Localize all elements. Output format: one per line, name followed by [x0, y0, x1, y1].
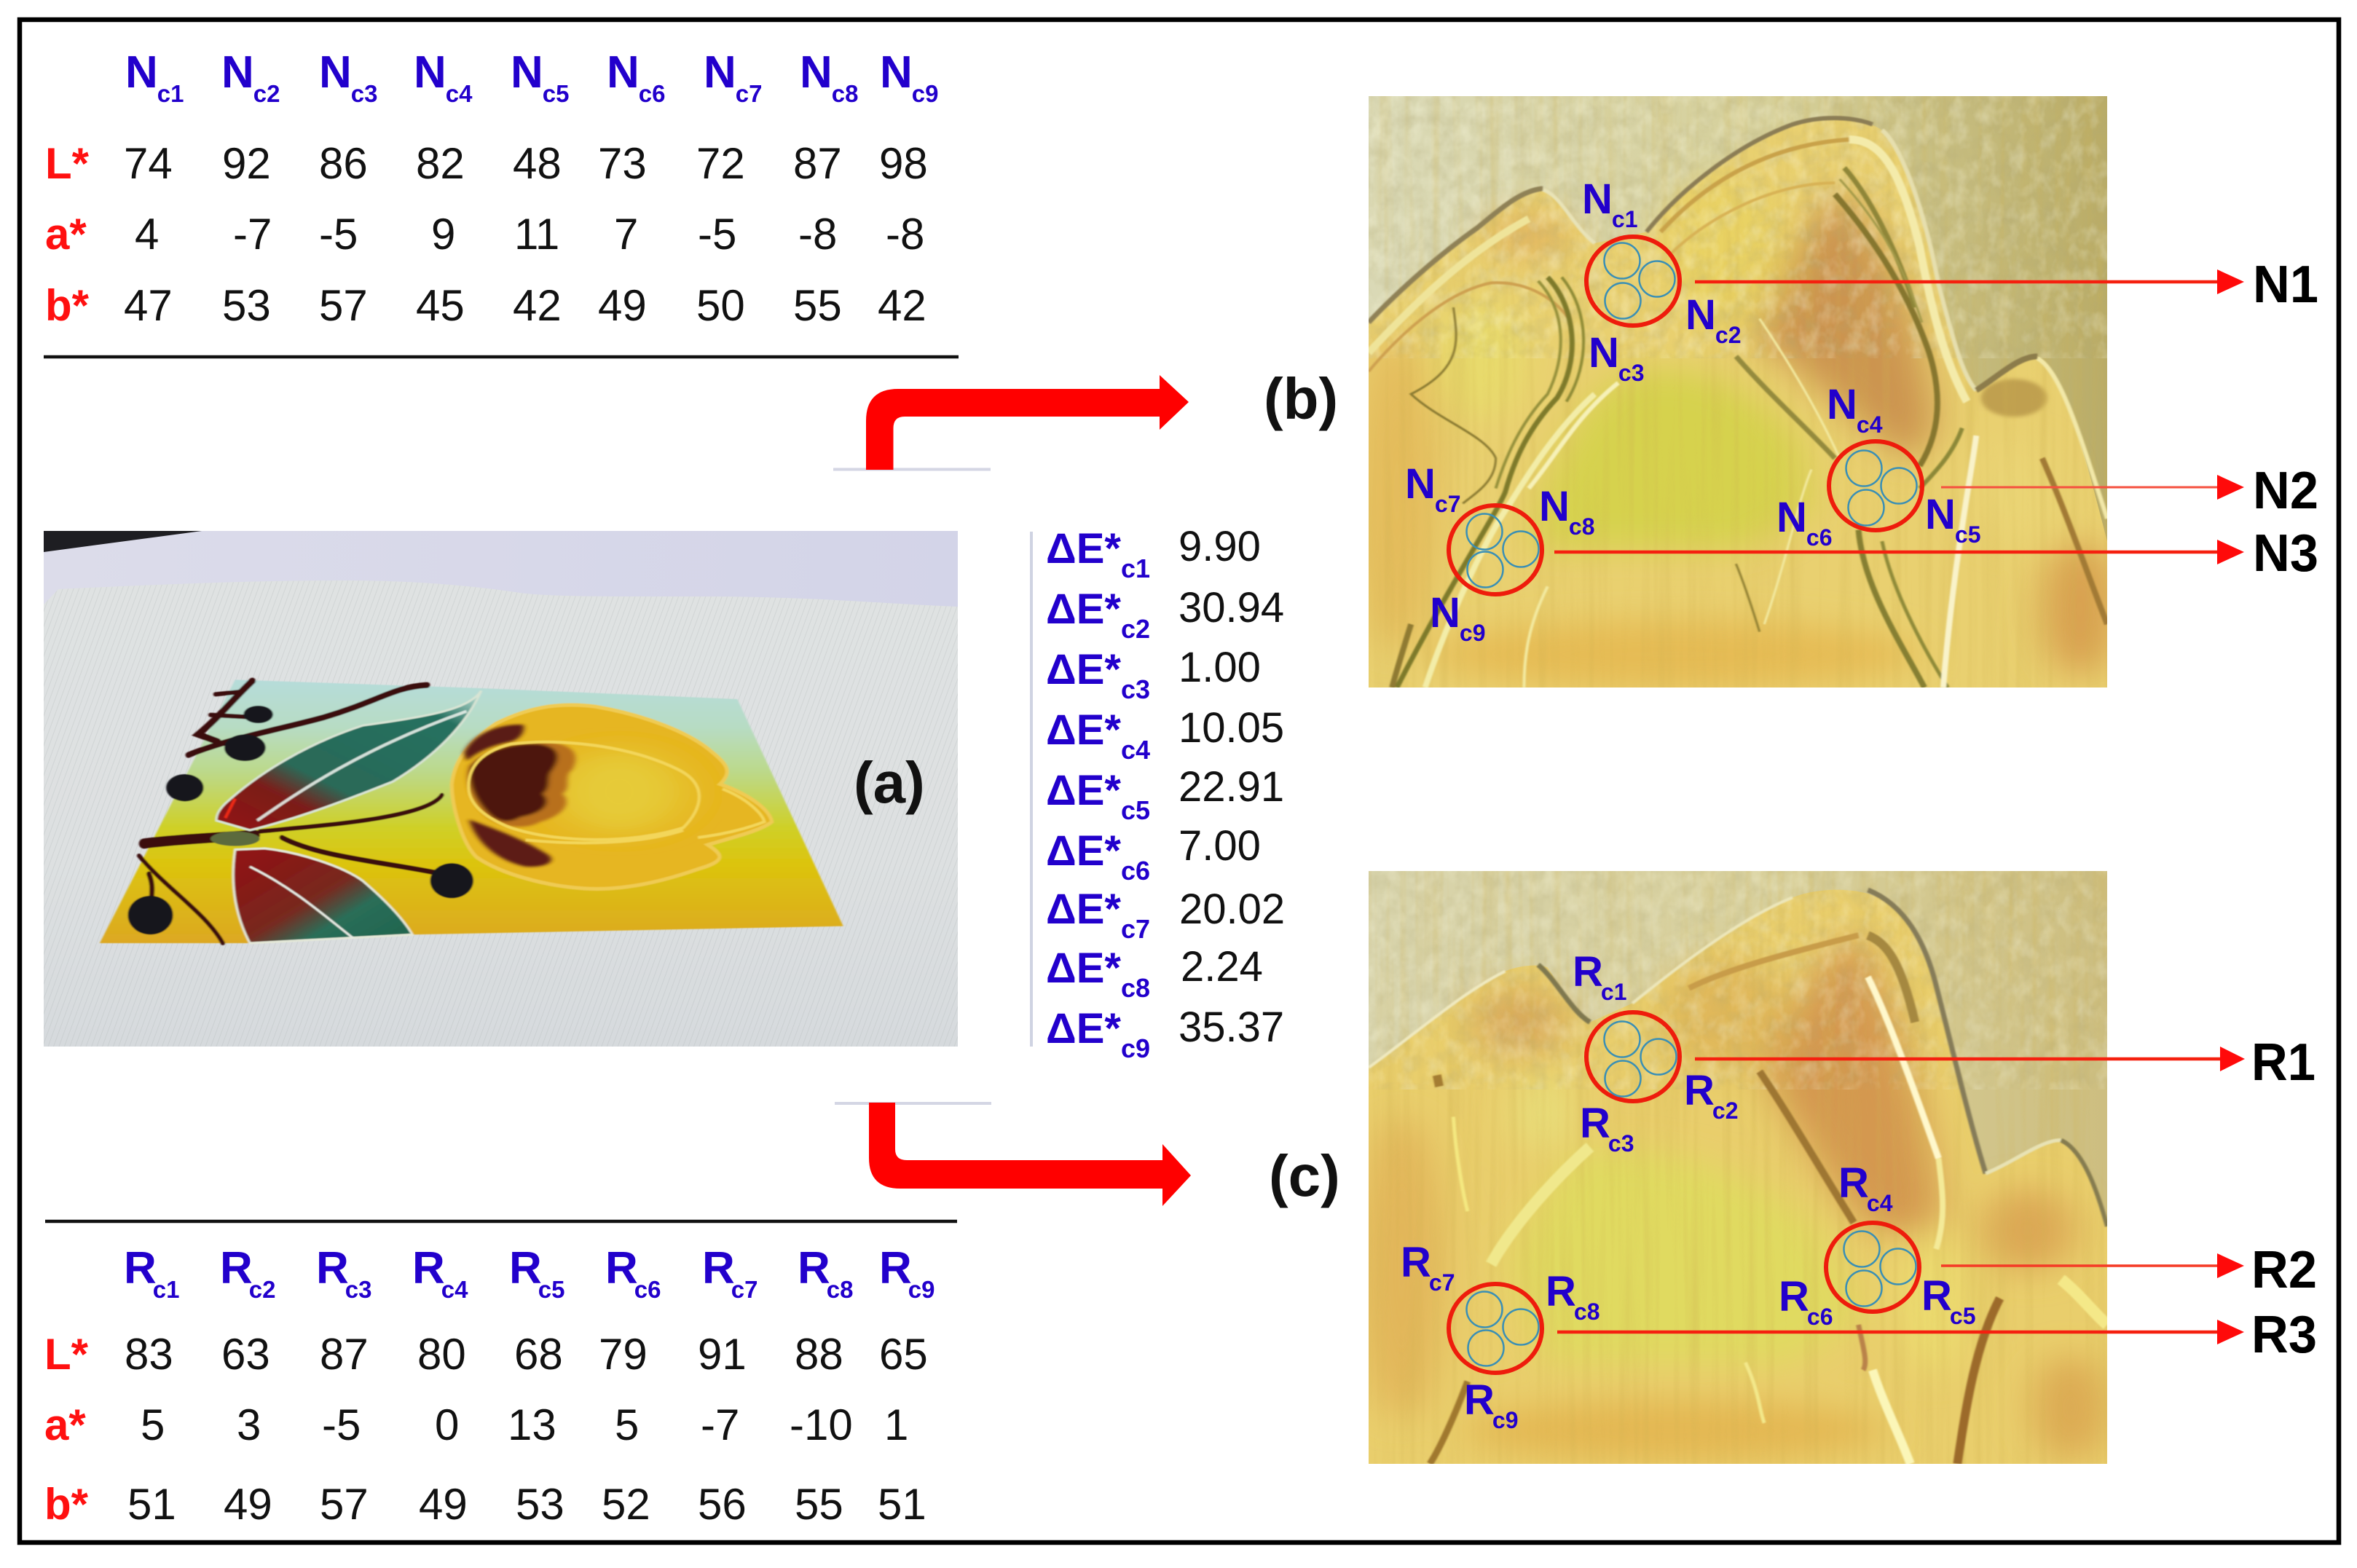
- row L*: [45, 139, 928, 188]
- table header: Nc1 to Nc9: N: [414, 47, 446, 98]
- row L*: 98: [879, 139, 928, 188]
- delta E c7: 20.02: [1179, 886, 1285, 933]
- row b*: 57: [319, 281, 368, 330]
- row L*: L*: [45, 139, 90, 188]
- table header: Nc1 to Nc9: c5: [543, 80, 570, 107]
- R sample labels: R: [1921, 1272, 1952, 1320]
- row b*: [44, 1480, 926, 1529]
- panel c ridge lines: [1369, 890, 2107, 1464]
- table header: Rc1 to Rc9: c3: [345, 1276, 371, 1303]
- panel c: close-up of reproduction: [1359, 871, 2108, 1464]
- table header: Rc1 to Rc9: c4: [441, 1276, 468, 1303]
- row a*: 0: [435, 1400, 459, 1449]
- row L*: 74: [124, 139, 173, 188]
- N sample labels: c1: [1612, 206, 1637, 232]
- table header: Rc1 to Rc9: [124, 1243, 935, 1303]
- R sample labels: c5: [1950, 1303, 1975, 1329]
- N sample labels: c3: [1618, 360, 1644, 386]
- delta E c1: 9.90: [1178, 523, 1261, 570]
- N sample labels: c4: [1857, 411, 1883, 438]
- R sample labels: [1401, 948, 1975, 1433]
- row L*: 87: [793, 139, 842, 188]
- row a*: -5: [698, 210, 736, 259]
- table header: Nc1 to Nc9: N: [704, 47, 736, 98]
- arrow to R3: [1557, 1320, 2244, 1344]
- table header: Nc1 to Nc9: c9: [912, 80, 938, 107]
- arrow to N2: [1941, 475, 2244, 500]
- row a*: 9: [431, 210, 455, 259]
- R sample labels: R: [1573, 948, 1603, 996]
- row a*: 7: [614, 210, 638, 259]
- delta E c2: [1046, 584, 1284, 644]
- table header: Nc1 to Nc9: c2: [253, 80, 280, 107]
- delta E c9: ΔE*: [1046, 1005, 1121, 1052]
- delta E c8: [1046, 943, 1263, 1003]
- panel label (a): (a): [854, 750, 925, 815]
- row a*: -8: [886, 210, 924, 259]
- upper leaf: [216, 690, 481, 830]
- table header: Nc1 to Nc9: c8: [832, 80, 858, 107]
- N sample labels: N: [1405, 460, 1436, 508]
- table header: Nc1 to Nc9: c7: [736, 80, 762, 107]
- N sample labels: N: [1582, 176, 1613, 223]
- delta E c2: ΔE*: [1046, 586, 1121, 633]
- table header: Rc1 to Rc9: R: [220, 1243, 253, 1293]
- N sample labels: c2: [1715, 322, 1741, 348]
- R sample labels: R: [1580, 1100, 1610, 1147]
- delta E c8: 2.24: [1181, 943, 1263, 990]
- branches: [139, 681, 442, 943]
- table header: Nc1 to Nc9: N: [125, 47, 158, 98]
- delta E c6: ΔE*: [1046, 827, 1121, 875]
- lower leaf: [233, 848, 412, 943]
- arrow to R2: [1941, 1253, 2244, 1278]
- row b*: 53: [222, 281, 271, 330]
- row b*: 51: [878, 1480, 926, 1529]
- row b*: 51: [127, 1480, 176, 1529]
- label N2: N2: [2253, 462, 2318, 520]
- row a*: 3: [237, 1400, 261, 1449]
- row a*: -5: [322, 1400, 361, 1449]
- row L*: 91: [698, 1330, 747, 1379]
- table header: Rc1 to Rc9: R: [412, 1243, 445, 1293]
- N sample labels: N: [1430, 589, 1460, 637]
- row L*: 82: [416, 139, 465, 188]
- arrow to R1: [1695, 1047, 2245, 1071]
- flower dark shading: [464, 725, 575, 867]
- R sample labels: c3: [1608, 1130, 1634, 1157]
- table header: Nc1 to Nc9: N: [880, 47, 913, 98]
- delta E c7: ΔE*: [1046, 886, 1121, 933]
- row L*: 48: [513, 139, 562, 188]
- table header: Rc1 to Rc9: c1: [153, 1276, 179, 1303]
- table header: Nc1 to Nc9: N: [511, 47, 543, 98]
- panel label (c): (c): [1269, 1143, 1340, 1208]
- table header: Nc1 to Nc9: c6: [639, 80, 666, 107]
- table header: Nc1 to Nc9: N: [319, 47, 352, 98]
- table header: Nc1 to Nc9: c3: [351, 80, 377, 107]
- row a*: [44, 1400, 908, 1449]
- N sample labels: N: [1827, 381, 1857, 428]
- delta E c7: [1046, 886, 1285, 944]
- R sample labels: R: [1464, 1376, 1495, 1424]
- delta E c5: 22.91: [1178, 763, 1284, 811]
- delta E c5: c5: [1121, 795, 1150, 825]
- delta E c1: ΔE*: [1046, 525, 1121, 572]
- row L*: 68: [514, 1330, 563, 1379]
- row b*: 52: [602, 1480, 650, 1529]
- N sample labels: c5: [1955, 521, 1980, 548]
- row b*: b*: [44, 1480, 89, 1529]
- region N3 circles: [1449, 505, 1542, 594]
- row a*: 11: [514, 210, 559, 259]
- R sample labels: c2: [1712, 1098, 1738, 1124]
- region R3 circles: [1449, 1284, 1542, 1373]
- delta E c4: [1046, 704, 1284, 765]
- delta E c2: c2: [1121, 614, 1150, 644]
- panel c surface: [1359, 871, 2108, 1464]
- table header: Rc1 to Rc9: R: [124, 1243, 157, 1293]
- table: R colour coordinates: [44, 1243, 935, 1529]
- row b*: 57: [320, 1480, 369, 1529]
- delta E c8: ΔE*: [1046, 945, 1121, 992]
- flower: [452, 705, 772, 889]
- table header: Rc1 to Rc9: c5: [538, 1276, 565, 1303]
- N sample labels: c6: [1806, 524, 1832, 551]
- panel b ridge lines: [1369, 118, 2107, 688]
- table header: Rc1 to Rc9: c2: [249, 1276, 275, 1303]
- table header: Rc1 to Rc9: R: [798, 1243, 830, 1293]
- N sample labels: N: [1776, 494, 1807, 541]
- R sample labels: R: [1684, 1067, 1715, 1114]
- row L*: 88: [795, 1330, 843, 1379]
- row a*: 5: [615, 1400, 639, 1449]
- R sample labels: R: [1401, 1239, 1431, 1286]
- panel label (b): (b): [1264, 366, 1338, 431]
- row L*: 92: [222, 139, 271, 188]
- row b*: 55: [793, 281, 842, 330]
- table: N colour coordinates: [45, 47, 938, 330]
- R sample labels: c9: [1492, 1407, 1518, 1433]
- leaf junction: [210, 832, 260, 846]
- table header: Rc1 to Rc9: R: [702, 1243, 735, 1293]
- panel c texture: [1369, 871, 2107, 1464]
- row a*: -7: [701, 1400, 739, 1449]
- delta E c4: 10.05: [1178, 704, 1284, 752]
- row L*: L*: [44, 1330, 89, 1379]
- row a*: 4: [135, 210, 159, 259]
- flower centre tint: [555, 750, 683, 832]
- row L*: 73: [598, 139, 647, 188]
- row L*: 87: [320, 1330, 369, 1379]
- table header: Nc1 to Nc9: N: [800, 47, 833, 98]
- arrow to N3: [1554, 540, 2244, 564]
- delta E c4: c4: [1121, 735, 1150, 765]
- row L*: 63: [221, 1330, 270, 1379]
- R sample labels: R: [1779, 1273, 1809, 1320]
- delta E c1: c1: [1121, 553, 1150, 583]
- row b*: 49: [224, 1480, 272, 1529]
- delta E c6: [1046, 822, 1261, 886]
- row L*: 72: [696, 139, 745, 188]
- N sample labels: N: [1685, 291, 1716, 339]
- table header: Rc1 to Rc9: c9: [908, 1276, 935, 1303]
- row L*: 65: [879, 1330, 928, 1379]
- region R2 circles: [1826, 1223, 1919, 1312]
- row b*: 49: [598, 281, 647, 330]
- delta E c2: 30.94: [1178, 584, 1284, 631]
- row a*: -10: [790, 1400, 853, 1449]
- R sample labels: R: [1546, 1268, 1576, 1315]
- delta E c3: 1.00: [1178, 644, 1261, 691]
- N sample labels: c7: [1435, 491, 1460, 517]
- row L*: 79: [599, 1330, 648, 1379]
- panel c markers and labels: [1401, 948, 2317, 1433]
- N sample labels: N: [1925, 491, 1956, 538]
- row L*: 83: [125, 1330, 173, 1379]
- table header: Nc1 to Nc9: N: [221, 47, 254, 98]
- row a*: -8: [798, 210, 837, 259]
- panel b markers and labels: [1405, 176, 2318, 646]
- paper background: [44, 531, 958, 1047]
- table header: Rc1 to Rc9: R: [605, 1243, 638, 1293]
- row a*: 13: [508, 1400, 556, 1449]
- label N3: N3: [2253, 524, 2318, 583]
- R sample labels: R: [1838, 1159, 1869, 1207]
- table header: Nc1 to Nc9: N: [607, 47, 640, 98]
- panel b surface: [1355, 96, 2117, 688]
- N sample labels: c9: [1460, 620, 1485, 646]
- N sample labels: N: [1539, 483, 1570, 530]
- delta E c3: [1046, 644, 1261, 704]
- delta E c6: 7.00: [1178, 822, 1261, 870]
- panel b: close-up of original print: [1355, 96, 2117, 688]
- region N2 circles: [1829, 441, 1922, 530]
- label R1: R1: [2251, 1033, 2315, 1092]
- table header: Nc1 to Nc9: c4: [446, 80, 473, 107]
- panel b texture: [1369, 96, 2107, 688]
- arrow: photo to panel c: [835, 1103, 1191, 1206]
- row b*: 56: [698, 1480, 747, 1529]
- row L*: 86: [319, 139, 368, 188]
- R sample labels: c1: [1601, 979, 1626, 1005]
- row a*: [45, 210, 924, 259]
- photo (a): printed painting on textured paper: [44, 531, 958, 1047]
- R sample labels: c8: [1574, 1299, 1599, 1325]
- table header: Rc1 to Rc9: R: [509, 1243, 542, 1293]
- region R1 circles: [1586, 1012, 1680, 1101]
- delta E c8: c8: [1121, 973, 1150, 1003]
- row a*: a*: [44, 1400, 86, 1449]
- delta E c3: ΔE*: [1046, 646, 1121, 693]
- berries: [127, 706, 473, 934]
- delta E c4: ΔE*: [1046, 706, 1121, 754]
- R sample labels: c4: [1867, 1190, 1893, 1216]
- table header: Rc1 to Rc9: R: [316, 1243, 349, 1293]
- delta E c9: c9: [1121, 1033, 1150, 1063]
- table header: Rc1 to Rc9: c8: [827, 1276, 854, 1303]
- row b*: 42: [878, 281, 926, 330]
- painting: [100, 679, 843, 943]
- R sample labels: c7: [1429, 1269, 1455, 1296]
- label N1: N1: [2253, 256, 2318, 314]
- row b*: 55: [795, 1480, 843, 1529]
- row a*: 5: [141, 1400, 165, 1449]
- row a*: -7: [233, 210, 272, 259]
- row b*: 50: [696, 281, 745, 330]
- table header: Rc1 to Rc9: c6: [634, 1276, 661, 1303]
- N sample labels: N: [1589, 329, 1619, 377]
- N sample labels: c8: [1569, 513, 1594, 540]
- row a*: -5: [319, 210, 358, 259]
- row b*: b*: [45, 281, 90, 330]
- arrow: photo to panel b: [833, 375, 1189, 470]
- R sample labels: c6: [1807, 1304, 1833, 1330]
- delta E list: [1030, 523, 1285, 1063]
- delta E c6: c6: [1121, 856, 1150, 886]
- row b*: [45, 281, 926, 330]
- label R2: R2: [2251, 1241, 2317, 1299]
- row b*: 42: [513, 281, 562, 330]
- delta E c5: [1046, 763, 1284, 825]
- delta E c3: c3: [1121, 674, 1150, 704]
- table header: Nc1 to Nc9: [125, 47, 938, 107]
- delta E c9: [1046, 1004, 1284, 1063]
- row L*: [44, 1330, 928, 1379]
- row b*: 53: [516, 1480, 564, 1529]
- row b*: 45: [416, 281, 465, 330]
- row L*: 80: [417, 1330, 466, 1379]
- delta E c5: ΔE*: [1046, 767, 1121, 814]
- delta E c9: 35.37: [1178, 1004, 1284, 1051]
- table header: Rc1 to Rc9: R: [879, 1243, 912, 1293]
- flower ridges: [468, 742, 765, 843]
- region N1 circles: [1586, 237, 1680, 326]
- arrow to N1: [1695, 269, 2244, 294]
- delta E c7: c7: [1121, 914, 1150, 944]
- N sample labels: [1405, 176, 1980, 646]
- row a*: a*: [45, 210, 87, 259]
- row b*: 49: [419, 1480, 468, 1529]
- row a*: 1: [884, 1400, 908, 1449]
- table header: Nc1 to Nc9: c1: [157, 80, 184, 107]
- row b*: 47: [124, 281, 173, 330]
- delta E c1: [1046, 523, 1261, 583]
- label R3: R3: [2251, 1306, 2317, 1364]
- table header: Rc1 to Rc9: c7: [731, 1276, 758, 1303]
